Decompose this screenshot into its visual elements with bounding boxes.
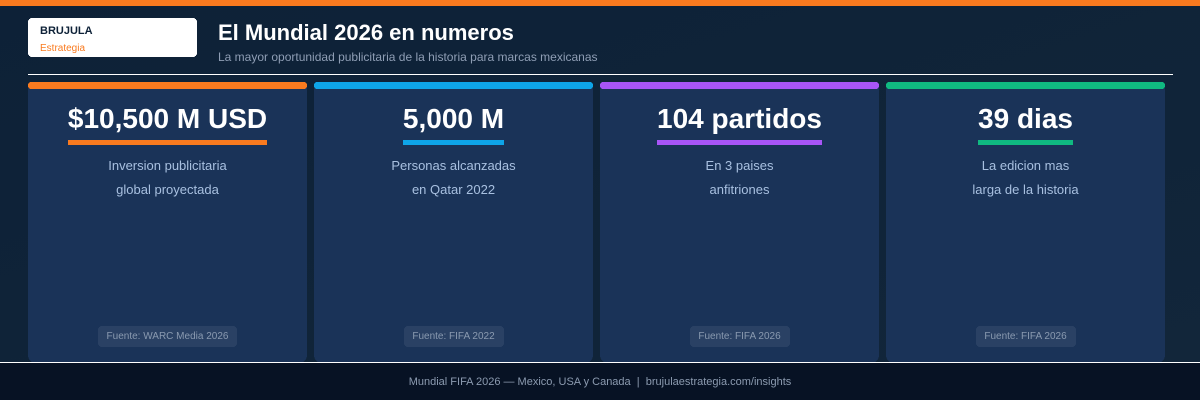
logo badge <box>28 18 197 57</box>
source tag: Fuente: FIFA 2026 <box>984 331 1067 342</box>
logo name: BRUJULA <box>40 25 93 37</box>
panel: inversion publicitaria <box>28 82 307 362</box>
description line 1: Inversion publicitaria <box>108 158 227 173</box>
stat value: $10,500 M USD <box>68 103 267 134</box>
description line 2: global proyectada <box>116 182 219 197</box>
stat value: 39 dias <box>978 103 1073 134</box>
top accent bar <box>0 0 1200 6</box>
title: El Mundial 2026 en numeros <box>218 20 514 45</box>
description line 2: en Qatar 2022 <box>412 182 495 197</box>
description line 2: larga de la historia <box>972 182 1079 197</box>
description line 1: La edicion mas <box>982 158 1069 173</box>
stat value: 104 partidos <box>657 103 822 134</box>
panel: partidos <box>600 82 879 362</box>
panel: personas alcanzadas <box>314 82 593 362</box>
subtitle: La mayor oportunidad publicitaria de la historia para marcas mexicanas <box>218 50 598 64</box>
footer text: Mundial FIFA 2026 — Mexico, USA y Canada | brujulaestrategia.com/insights <box>409 376 791 388</box>
description line 1: En 3 paises <box>706 158 773 173</box>
stat value: 5,000 M <box>403 103 504 134</box>
panel: dias <box>886 82 1165 362</box>
source tag: Fuente: FIFA 2022 <box>412 331 495 342</box>
source tag: Fuente: WARC Media 2026 <box>107 331 228 342</box>
description line 2: anfitriones <box>710 182 769 197</box>
source tag: Fuente: FIFA 2026 <box>698 331 781 342</box>
footer <box>0 362 1200 400</box>
description line 1: Personas alcanzadas <box>391 158 516 173</box>
logo tagline: Estrategia <box>40 43 85 54</box>
